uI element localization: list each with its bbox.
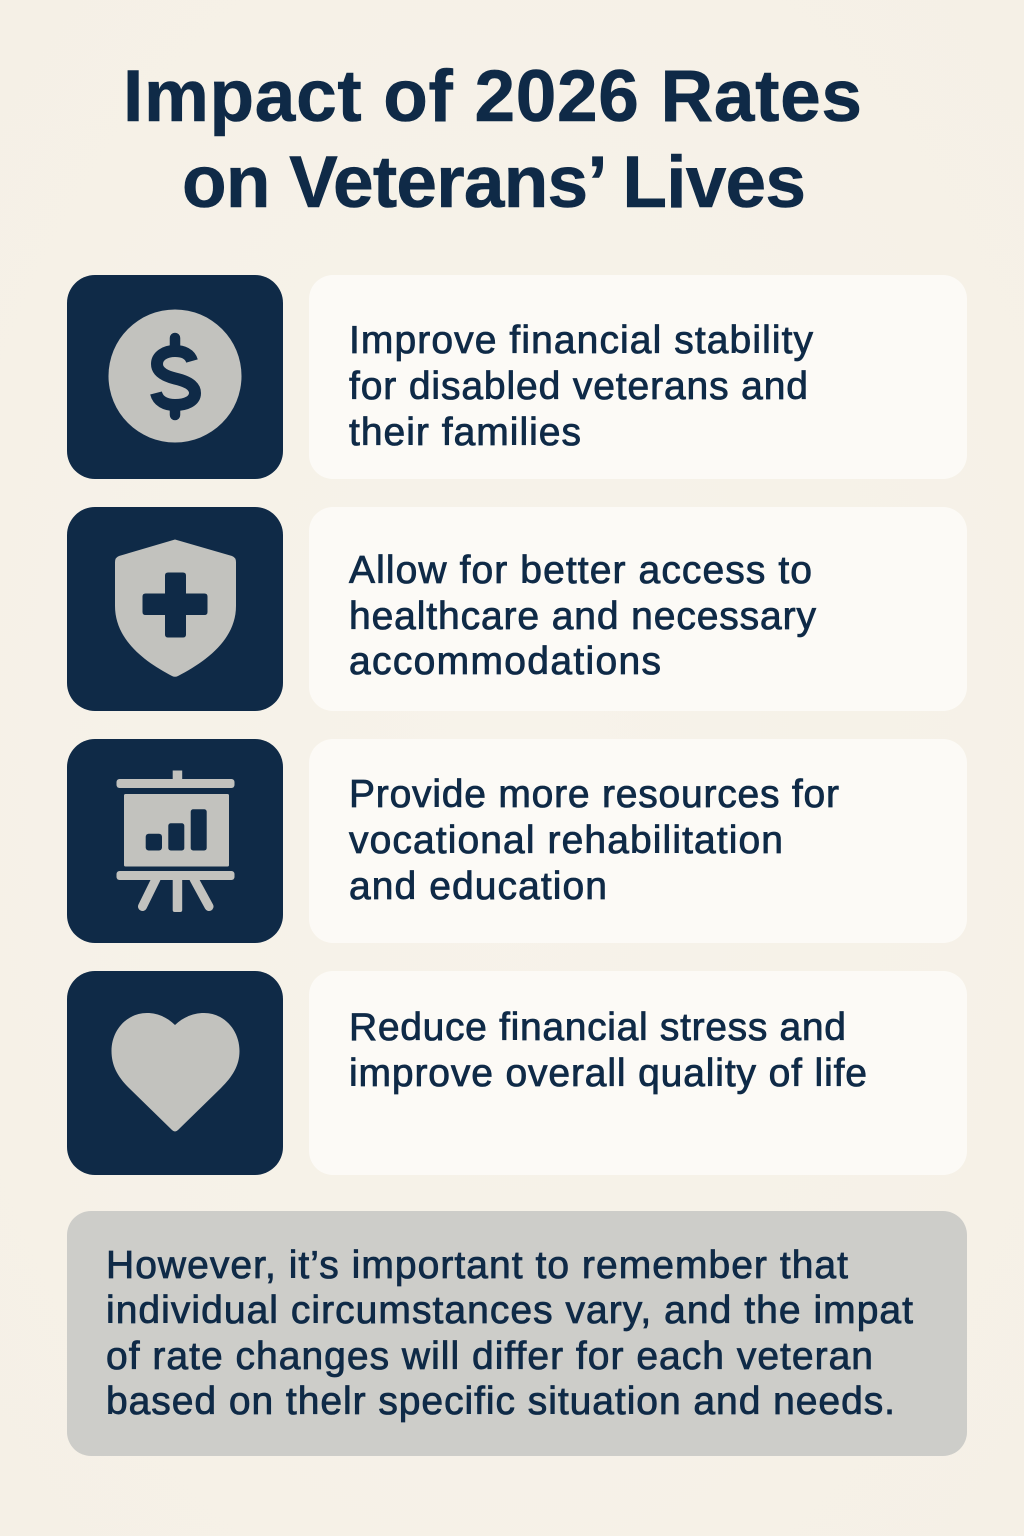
text card: quality of life: Reduce financial stress and — [349, 1006, 846, 1049]
icon: heart — [67, 971, 283, 1175]
panel: financial stability row — [67, 275, 967, 479]
text card: healthcare: healthcare and necessary — [349, 595, 816, 638]
text card: vocational — [309, 739, 967, 943]
icon: shield with cross — [67, 507, 283, 711]
title: on Veterans’ Lives — [182, 142, 806, 223]
panel: vocational row — [67, 739, 967, 943]
panel: quality of life row — [67, 971, 967, 1175]
text card: financial stability: their families — [349, 411, 581, 454]
text card: vocational: vocational rehabilitation — [349, 819, 783, 862]
text card: healthcare: Allow for better access to — [349, 549, 812, 592]
text card: financial stability: Improve financial stability — [349, 319, 814, 362]
text card: vocational: Provide more resources for — [349, 773, 839, 816]
icon: presentation board with bar chart — [67, 739, 283, 943]
text card: healthcare: accommodations — [349, 640, 661, 683]
text card: quality of life — [309, 971, 967, 1175]
text card: healthcare — [309, 507, 967, 711]
title: Impact of 2026 Rates — [123, 56, 862, 137]
text card: financial stability: for disabled veterans and — [349, 365, 808, 408]
callout: individual circumstances note — [67, 1211, 967, 1456]
text card: vocational: and education — [349, 865, 607, 908]
callout: individual circumstances note: individual circumstances vary, and the impat — [106, 1289, 913, 1332]
callout: individual circumstances note: based on thelr specific situation and needs. — [106, 1380, 895, 1423]
panel: healthcare row — [67, 507, 967, 711]
text card: quality of life: improve overall quality of life — [349, 1052, 867, 1095]
icon: dollar coin — [67, 275, 283, 479]
title — [123, 56, 862, 223]
callout: individual circumstances note: However, it’s important to remember that — [106, 1244, 848, 1287]
text card: financial stability — [309, 275, 967, 479]
callout: individual circumstances note: of rate changes will differ for each veteran — [106, 1335, 873, 1378]
